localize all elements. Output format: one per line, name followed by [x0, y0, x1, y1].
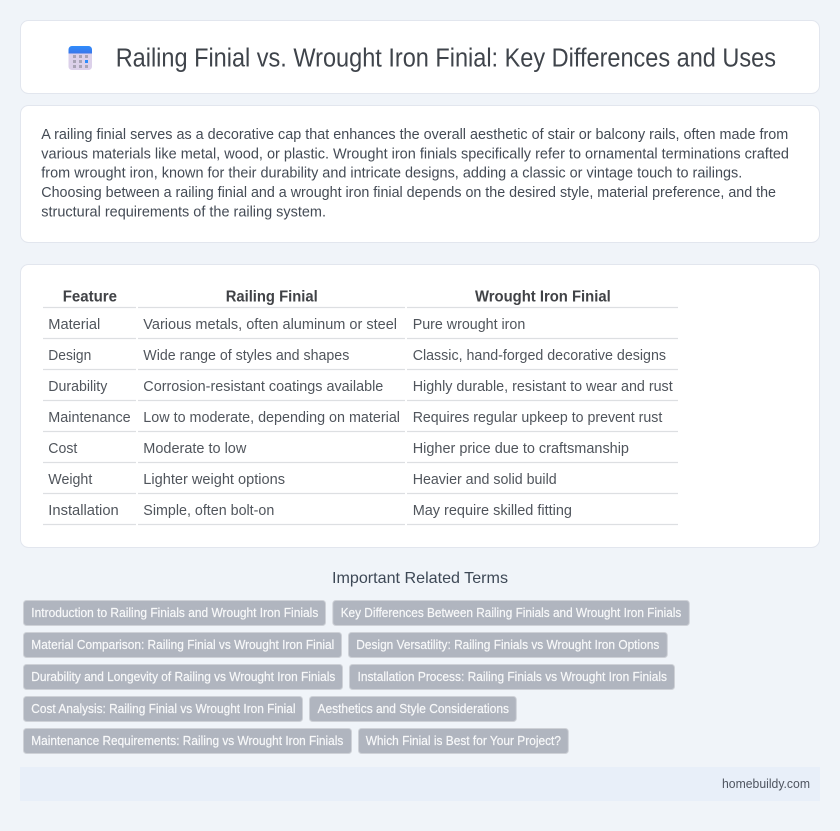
chip: Durability and Longevity of Railing vs Wrought Iron Finials: [31, 670, 335, 684]
chip: [24, 600, 326, 626]
table header row: Wrought Iron Finial: [475, 289, 611, 306]
heading: important related terms: Important Related Terms: [332, 570, 508, 587]
chip: [348, 632, 667, 658]
panel: related term chips: [24, 600, 689, 754]
table row: maintenance: [48, 410, 662, 426]
table header row: [63, 289, 611, 306]
table row: cost: [48, 441, 629, 457]
table row: durability: Durability: [48, 379, 108, 395]
table row: maintenance: Maintenance: [48, 410, 131, 426]
table row: material: [48, 317, 525, 333]
chip: [310, 696, 516, 722]
table row: design: Classic, hand-forged decorative designs: [413, 348, 666, 364]
table row: durability: [48, 379, 673, 395]
table row: cost: Higher price due to craftsmanship: [413, 441, 629, 457]
chip: Aesthetics and Style Considerations: [318, 702, 509, 716]
text block: introduction: various materials like metal, wood, or plastic. Wrought iron finials specifically refer to ornamental terminations crafted: [41, 146, 789, 162]
table row: cost: Moderate to low: [143, 441, 247, 457]
footer: [20, 767, 820, 801]
table row: design: Wide range of styles and shapes: [143, 348, 349, 364]
chip: Material Comparison: Railing Finial vs Wrought Iron Finial: [31, 638, 334, 652]
chip: [24, 632, 342, 658]
chip: Maintenance Requirements: Railing vs Wrought Iron Finials: [31, 734, 343, 748]
table row: material: Various metals, often aluminum or steel: [143, 317, 397, 333]
text block: introduction: structural requirements of the railing system.: [41, 204, 326, 220]
chip: Design Versatility: Railing Finials vs Wrought Iron Options: [356, 638, 659, 652]
chip: [24, 728, 352, 754]
chip: [350, 664, 674, 690]
table row: durability: Highly durable, resistant to wear and rust: [413, 379, 673, 395]
table row: durability: Corrosion-resistant coatings available: [143, 379, 383, 395]
text block: introduction: from wrought iron, known for their durability and intricate designs, adding a classic or vintage touch to railings.: [41, 166, 742, 182]
text block: introduction: [41, 127, 789, 220]
table row: weight: [48, 472, 557, 488]
table row: cost: Cost: [48, 441, 77, 457]
text block: introduction: A railing finial serves as a decorative cap that enhances the overall aesthetic of stair or balcony rails, often made from: [41, 127, 788, 143]
table row: design: Design: [48, 348, 91, 364]
table row: installation: Installation: [48, 503, 119, 519]
table row: installation: Simple, often bolt-on: [143, 503, 274, 519]
chip: Which Finial is Best for Your Project?: [366, 734, 561, 748]
icon: calendar: [68, 46, 92, 70]
table row: maintenance: Low to moderate, depending on material: [143, 410, 400, 426]
table row: weight: Weight: [48, 472, 92, 488]
panel: header: [20, 20, 820, 94]
table header row: Feature: [63, 289, 117, 306]
table row: maintenance: Requires regular upkeep to prevent rust: [413, 410, 662, 426]
table row: installation: May require skilled fitting: [413, 503, 572, 519]
chip: Cost Analysis: Railing Finial vs Wrought Iron Finial: [31, 702, 296, 716]
text block: introduction: Choosing between a railing finial and a wrought iron finial depends on the desired style, material preference, and the: [41, 185, 776, 201]
table row: weight: Lighter weight options: [143, 472, 285, 488]
table row: material: Pure wrought iron: [413, 317, 525, 333]
chip: [24, 696, 302, 722]
panel: comparison table: [20, 264, 820, 548]
panel: introduction paragraph: [20, 106, 820, 242]
chip: Installation Process: Railing Finials vs Wrought Iron Finials: [358, 670, 667, 684]
table row: weight: Heavier and solid build: [413, 472, 557, 488]
chip: Introduction to Railing Finials and Wrought Iron Finials: [31, 606, 318, 620]
table header row: Railing Finial: [226, 289, 318, 306]
table row: material: Material: [48, 317, 100, 333]
table row: installation: [48, 503, 572, 519]
footer source text: homebuildy.com: [722, 776, 810, 791]
chip: Key Differences Between Railing Finials and Wrought Iron Finials: [341, 606, 681, 620]
chip: [358, 728, 568, 754]
chip: [333, 600, 689, 626]
table row: design: [48, 348, 666, 364]
chip: [24, 664, 342, 690]
title: Railing Finial vs. Wrought Iron Finial: Key Differences and Uses: [116, 44, 776, 72]
